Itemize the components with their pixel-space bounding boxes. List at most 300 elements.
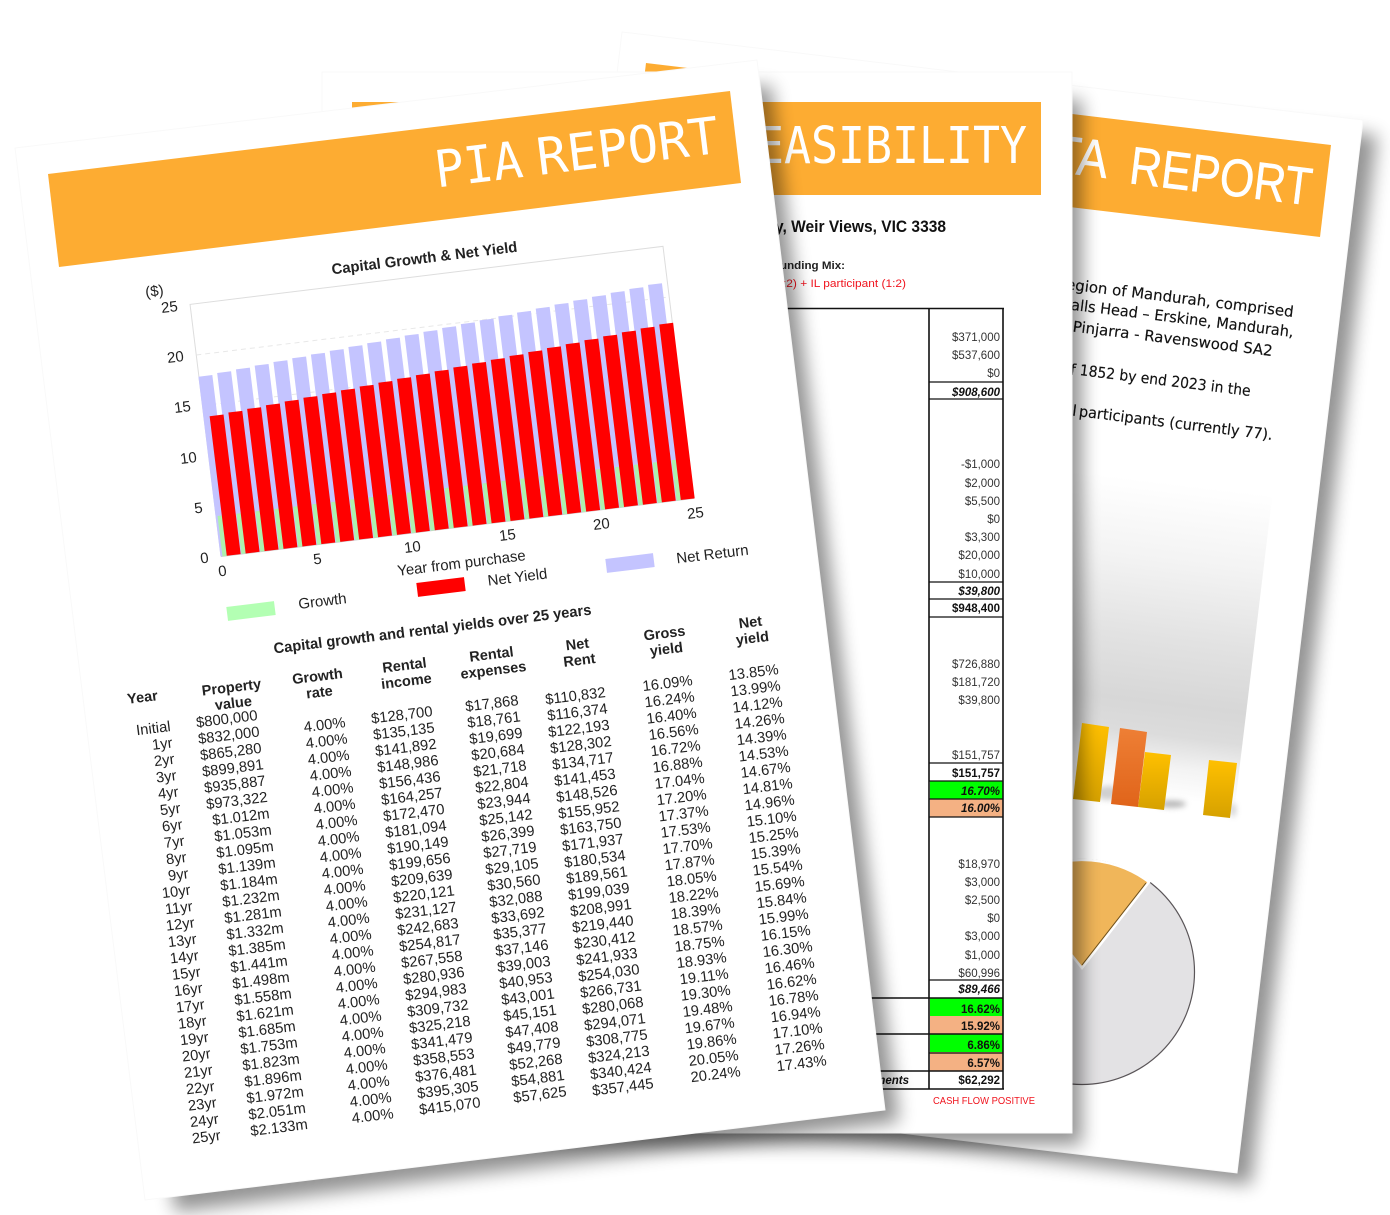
feasibility table: $371,000 — [952, 332, 1000, 344]
table column: net yield: 15.10% — [746, 809, 797, 831]
table column: property value: $1.896m — [244, 1068, 303, 1091]
table column: rental income: $280,936 — [402, 965, 466, 988]
table column: property value: $1.621m — [236, 1003, 295, 1025]
table column: net rent: $180,534 — [563, 848, 626, 871]
table headers: Gross — [643, 624, 686, 645]
table column: net yield: 17.26% — [774, 1037, 826, 1059]
table column: growth rate: 4.00% — [345, 1057, 389, 1078]
table column: net rent: $171,937 — [561, 832, 624, 855]
table column: net yield: 14.67% — [740, 760, 791, 782]
table column: growth rate: 4.00% — [305, 731, 348, 752]
table headers: Rental — [382, 655, 427, 677]
table column: gross yield: 18.22% — [668, 885, 720, 907]
back page paragraph text: Pinjarra - Ravenswood SA2 — [1072, 318, 1274, 360]
chart legend: Net Return — [675, 542, 749, 567]
feasibility table: 16.00% — [961, 803, 1000, 815]
front page banner: PIA — [431, 131, 526, 200]
table column: gross yield: 16.56% — [648, 722, 699, 744]
table column: property value: $1.053m — [213, 823, 273, 845]
table column: rental income: $267,558 — [400, 949, 464, 972]
x axis labels: 0 — [217, 563, 228, 580]
table column: growth rate: 4.00% — [329, 927, 373, 948]
table column: year: 3yr — [155, 768, 178, 787]
table column: growth rate: 4.00% — [321, 862, 364, 883]
x axis labels: Year from purchase — [396, 547, 527, 580]
table column: net rent: $155,952 — [557, 799, 620, 823]
table column: rental expenses: $26,399 — [480, 823, 535, 846]
feasibility table: $0 — [987, 913, 1000, 925]
table column: gross yield: 19.30% — [680, 983, 732, 1005]
table column: rental income: $395,305 — [416, 1079, 480, 1102]
feasibility table: $60,996 — [958, 968, 1000, 980]
feasibility table: 6.86% — [967, 1040, 1000, 1052]
table column: growth rate: 4.00% — [333, 960, 377, 981]
panel: middle page feasibility — [322, 72, 1082, 1145]
table column: gross yield: 18.39% — [670, 901, 722, 923]
table column: year: 1yr — [151, 735, 174, 754]
table column: gross yield: 18.05% — [666, 869, 718, 891]
table column: gross yield: 17.87% — [664, 852, 715, 874]
table column: rental expenses: $32,088 — [488, 889, 544, 911]
table column: net yield: 16.15% — [760, 923, 812, 945]
table column: property value: $1.281m — [223, 904, 283, 927]
table column: rental expenses: $43,001 — [500, 986, 556, 1009]
table headers: Rent — [562, 651, 597, 671]
table column: property value: $1.558m — [234, 986, 293, 1009]
table column: growth rate: 4.00% — [347, 1074, 391, 1095]
table column: rental expenses: $18,761 — [466, 709, 521, 732]
table column: property value: $1.972m — [246, 1084, 305, 1107]
table column: gross yield: 17.53% — [660, 820, 711, 842]
back page paragraph text: 1852 by end 2023 in the — [1079, 361, 1252, 400]
feasibility table: $39,800 — [958, 695, 1000, 707]
table headers: Rental — [469, 644, 514, 666]
table column: property value: $832,000 — [197, 724, 260, 748]
table column: net rent: $128,302 — [549, 734, 612, 757]
feasibility table: $62,292 — [958, 1075, 1000, 1087]
table column: year: 18yr — [177, 1014, 208, 1033]
table column: rental expenses: $45,151 — [502, 1003, 558, 1025]
table column: gross yield: 17.37% — [658, 803, 709, 825]
table column: net rent: $148,526 — [555, 783, 618, 806]
table column: rental expenses: $23,944 — [476, 791, 531, 813]
table column: net yield: 17.10% — [772, 1021, 824, 1043]
table column: net rent: $266,731 — [579, 978, 643, 1002]
table column: year: 16yr — [173, 981, 204, 1000]
y axis labels: 25 — [160, 298, 179, 317]
table column: gross yield: 18.57% — [672, 918, 724, 940]
table column: growth rate: 4.00% — [309, 764, 352, 785]
table column: net yield: 14.53% — [738, 744, 789, 766]
table column: net yield: 15.84% — [756, 890, 808, 912]
table headers: rate — [305, 683, 334, 702]
table column: year: 8yr — [165, 850, 188, 868]
table column: property value: $2.051m — [248, 1101, 307, 1124]
feasibility table: $2,000 — [965, 478, 1000, 490]
y axis labels: 0 — [199, 550, 210, 567]
middle page address heading: y, Weir Views, VIC 3338 — [775, 218, 946, 236]
table column: rental expenses: $39,003 — [496, 954, 552, 976]
table column: growth rate: 4.00% — [317, 829, 360, 850]
table headers: income — [380, 671, 433, 693]
table column: rental expenses: $35,377 — [492, 921, 548, 944]
table column: growth rate: 4.00% — [331, 943, 375, 964]
x axis labels: 25 — [686, 504, 705, 523]
panel: front page PIA report — [15, 60, 899, 1212]
table column: rental income: $156,436 — [378, 769, 441, 793]
table column: rental expenses: $52,268 — [508, 1052, 564, 1074]
feasibility table: ments — [875, 1075, 909, 1087]
table column: rental expenses: $29,105 — [484, 856, 539, 878]
x axis labels: 10 — [403, 538, 422, 557]
feasibility table: $151,757 — [952, 768, 1000, 780]
table headers: value — [214, 694, 253, 714]
table column: net yield: 14.81% — [742, 776, 793, 798]
table headers: yield — [735, 629, 770, 649]
table column: net rent: $294,071 — [583, 1011, 647, 1034]
table column: year: 12yr — [165, 915, 196, 935]
feasibility table: $3,000 — [965, 931, 1000, 943]
table column: growth rate: 4.00% — [313, 797, 356, 818]
table column: gross yield: 17.70% — [662, 836, 713, 858]
chart title: Capital Growth & Net Yield — [331, 239, 518, 278]
table column: net yield: 14.26% — [734, 711, 785, 733]
table column: gross yield: 16.72% — [650, 738, 701, 760]
table column: gross yield: 17.20% — [656, 787, 707, 809]
table column: net yield: 14.39% — [736, 727, 787, 749]
table column: net rent: $208,991 — [569, 897, 633, 920]
table headers — [126, 613, 770, 715]
table column: net yield: 16.78% — [768, 988, 820, 1010]
feasibility table: $151,757 — [952, 750, 1000, 762]
x axis labels: 20 — [592, 515, 611, 534]
table column: rental expenses: $47,408 — [504, 1019, 560, 1041]
table column: net rent: $280,068 — [581, 995, 645, 1018]
table column: net rent: $163,750 — [559, 815, 622, 839]
table column: rental income: $164,257 — [380, 786, 443, 809]
table column: net rent: $110,832 — [544, 685, 606, 708]
table column: rental income: $242,683 — [396, 916, 460, 939]
table column: rental expenses: $19,699 — [468, 726, 523, 748]
table column: net yield: 16.62% — [766, 972, 818, 994]
table column: rental expenses: $27,719 — [482, 840, 537, 862]
table column: growth rate: 4.00% — [323, 878, 366, 899]
table column: growth rate: 4.00% — [307, 748, 350, 769]
table column: growth rate: 4.00% — [343, 1041, 387, 1062]
x axis labels: 5 — [312, 551, 323, 568]
funding mix value: :2) + IL participant (1:2) — [783, 278, 906, 290]
table column: net yield: 15.39% — [750, 841, 801, 863]
table column: net rent: $189,561 — [565, 864, 628, 888]
feasibility table: $726,880 — [952, 659, 1000, 671]
chart legend: Net Yield — [487, 565, 548, 590]
table column: gross yield: 16.40% — [646, 706, 697, 728]
table column: property value: $800,000 — [195, 708, 258, 731]
chart legend: Growth — [297, 590, 347, 613]
table column: rental income: $358,553 — [412, 1046, 476, 1070]
table column: net rent: $254,030 — [577, 962, 641, 986]
table column: property value: $1.095m — [215, 839, 275, 862]
feasibility table: $18,970 — [958, 859, 1000, 871]
table column: net yield: 15.25% — [748, 825, 799, 847]
table column: growth rate: 4.00% — [319, 845, 362, 866]
y axis labels: 20 — [166, 348, 185, 367]
table column: gross yield: 16.09% — [642, 673, 693, 695]
feasibility table: $537,600 — [952, 350, 1000, 362]
table column: net rent: $357,445 — [591, 1076, 655, 1100]
table column: rental expenses: $54,881 — [510, 1068, 566, 1090]
feasibility table: $1,000 — [965, 950, 1000, 962]
table column: net yield: 16.46% — [764, 955, 816, 977]
table column: property value: $1.139m — [217, 855, 277, 878]
table column: rental income: $190,149 — [386, 834, 449, 858]
table column: net yield: 14.96% — [744, 792, 795, 814]
table headers: Growth — [291, 666, 344, 688]
table column: year: 14yr — [169, 948, 200, 967]
table column: gross yield: 19.67% — [684, 1015, 736, 1037]
table column: net rent: $340,424 — [589, 1060, 653, 1083]
panel: back page data report — [496, 32, 1377, 1185]
front page banner: REPORT — [533, 107, 722, 188]
table column: rental expenses: $57,625 — [512, 1084, 568, 1107]
y axis labels: 10 — [179, 449, 198, 468]
table column: rental income: $128,700 — [370, 704, 433, 727]
table column: rental income: $172,470 — [382, 802, 445, 825]
back page bar chart image — [960, 456, 1273, 822]
table column: rental expenses: $22,804 — [474, 775, 529, 797]
table column: year: 2yr — [153, 752, 176, 770]
table headers: yield — [649, 640, 684, 660]
table column: year: 24yr — [189, 1112, 220, 1131]
back page paragraph text — [1055, 274, 1295, 444]
table column: rental expenses: $25,142 — [478, 807, 533, 830]
back page paragraph text: alls Head – Erskine, Mandurah, — [1070, 296, 1295, 341]
x axis labels: 15 — [498, 526, 517, 545]
table column: year: 9yr — [167, 866, 190, 885]
table column: net yield: 15.99% — [758, 907, 810, 929]
table column: growth rate: 4.00% — [335, 976, 379, 997]
table column: year: 10yr — [161, 883, 192, 902]
table column: growth rate: 4.00% — [349, 1090, 393, 1111]
feasibility table: $0 — [987, 368, 1000, 380]
table column: rental expenses: $20,684 — [470, 742, 525, 764]
table column: net rent: $241,933 — [575, 946, 639, 969]
table column: rental expenses: $30,560 — [486, 872, 541, 895]
table column: gross yield: 19.86% — [686, 1032, 738, 1054]
feasibility table: 6.57% — [967, 1058, 1000, 1070]
chart legend — [226, 542, 749, 621]
back page banner: REPORT — [1127, 136, 1315, 217]
table column: year: 7yr — [163, 834, 186, 852]
feasibility table: $0 — [987, 514, 1000, 526]
table column: growth rate: 4.00% — [311, 780, 354, 801]
table column: rental expenses: $17,868 — [464, 693, 519, 715]
table column: net rent: $324,213 — [587, 1044, 651, 1067]
table column: growth rate: 4.00% — [303, 715, 346, 736]
table column: property value: $1.385m — [227, 937, 287, 960]
feasibility table: $3,000 — [965, 877, 1000, 889]
table column: year: 19yr — [179, 1030, 210, 1049]
feasibility table: $908,600 — [951, 387, 1001, 399]
table column: rental expenses: $33,692 — [490, 905, 546, 927]
table column: net yield: 13.85% — [728, 662, 779, 684]
table column: property value: $865,280 — [199, 741, 263, 764]
table headers: Net — [738, 614, 763, 632]
table column: rental income: $181,094 — [384, 818, 447, 842]
table column: net rent: $230,412 — [573, 930, 637, 953]
table column: year: 15yr — [171, 964, 202, 984]
table column: net yield: 15.69% — [754, 874, 806, 896]
table column: rental income: $199,656 — [388, 851, 451, 874]
table column: net yield: 17.43% — [776, 1053, 828, 1075]
table headers: Year — [126, 688, 159, 708]
table column: net rent: $122,193 — [547, 718, 610, 741]
back page pie chart — [970, 860, 1194, 1084]
feasibility table: $181,720 — [952, 677, 1000, 689]
feasibility table: $39,800 — [957, 586, 1001, 598]
feasibility table: $10,000 — [958, 569, 1000, 581]
table column: rental income: $148,986 — [376, 753, 439, 776]
table column: rental income: $325,218 — [408, 1014, 472, 1037]
x axis labels — [217, 504, 705, 580]
table column: rental income: $231,127 — [394, 900, 458, 923]
table column: property value: $1.823m — [242, 1052, 301, 1074]
table column: net yield: 15.54% — [752, 858, 804, 880]
table column: year: 5yr — [159, 801, 182, 819]
table column: year: Initial — [135, 719, 171, 739]
feasibility table: $948,400 — [952, 603, 1000, 615]
table column: gross yield: 20.05% — [688, 1048, 740, 1070]
y axis labels: 15 — [173, 398, 192, 417]
table column: property value: $1.332m — [225, 921, 285, 944]
table column: rental income: $141,892 — [374, 737, 437, 760]
middle page banner — [352, 102, 1041, 195]
table column: rental expenses: $49,779 — [506, 1035, 562, 1058]
table column: gross yield: 19.48% — [682, 999, 734, 1021]
table column: rental expenses: $21,718 — [472, 758, 527, 781]
table column: gross yield: 18.93% — [676, 950, 728, 972]
table column: net rent: $308,775 — [585, 1027, 649, 1051]
y axis labels — [144, 282, 210, 567]
feasibility table: 16.62% — [961, 1004, 1000, 1016]
series: net return — [194, 283, 688, 557]
table title: Capital growth and rental yields over 25 years — [273, 602, 592, 657]
table column: property value: $1.441m — [229, 953, 289, 976]
feasibility table — [700, 308, 1004, 1089]
table column: rental income: $415,070 — [418, 1095, 482, 1119]
feasibility table: $2,500 — [965, 895, 1000, 907]
table column: net yield: 13.99% — [730, 678, 781, 700]
table column: property value: $1.232m — [221, 888, 281, 911]
feasibility table: $20,000 — [958, 550, 1000, 562]
table column: gross yield: 16.88% — [652, 755, 703, 777]
table column: property value: $935,887 — [203, 774, 267, 797]
back page paragraph text: of — [1060, 359, 1077, 379]
feasibility table: $89,466 — [957, 984, 1001, 996]
table column: property value: $1.753m — [240, 1035, 299, 1058]
table column: year: 21yr — [183, 1063, 214, 1082]
table column: growth rate: 4.00% — [339, 1008, 383, 1029]
table column: year: 20yr — [181, 1046, 212, 1066]
feasibility table: $5,500 — [965, 496, 1000, 508]
table column: year: 22yr — [185, 1079, 216, 1098]
series: net yield — [205, 323, 695, 556]
table headers: Net — [565, 636, 590, 654]
back page paragraph text: l — [1071, 402, 1078, 420]
table column: year: 11yr — [164, 899, 194, 918]
table column: property value: $1.012m — [211, 806, 271, 829]
table column: net rent: $116,374 — [546, 701, 608, 725]
table column: rental expenses: $40,953 — [498, 970, 554, 993]
table headers: Property — [201, 676, 262, 700]
table column: property value: $1.184m — [219, 872, 279, 895]
y axis labels: ($) — [144, 282, 165, 301]
series: growth — [218, 460, 682, 556]
table column: property value: $899,891 — [201, 757, 265, 781]
table column: rental income: $294,983 — [404, 981, 468, 1005]
table column: rental income: $209,639 — [390, 867, 453, 890]
table column: net rent: $134,717 — [551, 750, 614, 774]
table column: net yield: 16.94% — [770, 1004, 822, 1026]
table column: gross yield: 17.04% — [654, 771, 705, 793]
feasibility table: 16.70% — [961, 786, 1000, 798]
table column: gross yield: 18.75% — [674, 934, 726, 956]
table column: rental expenses: $37,146 — [494, 938, 550, 960]
cash flow note: CASH FLOW POSITIVE — [933, 1095, 1035, 1107]
table column: gross yield: 20.24% — [690, 1064, 742, 1086]
table column: year: 25yr — [191, 1128, 222, 1147]
front page banner — [48, 91, 741, 267]
table column: property value: $973,322 — [205, 790, 269, 813]
table column: year: 4yr — [157, 785, 180, 803]
table column: growth rate: 4.00% — [351, 1106, 395, 1127]
table column: rental income: $254,817 — [398, 932, 462, 956]
table column: property value: $1.498m — [232, 970, 291, 993]
table column: year: 23yr — [187, 1095, 218, 1115]
back page banner: DATA — [988, 117, 1112, 190]
table column: rental income: $341,479 — [410, 1030, 474, 1053]
table column: rental income: $376,481 — [414, 1063, 478, 1086]
back page paragraph text: participants (currently 77). — [1078, 402, 1274, 444]
table column: net rent: $219,440 — [571, 913, 635, 937]
table column: growth rate: 4.00% — [325, 894, 368, 915]
table column: gross yield: 19.11% — [679, 966, 730, 988]
table column: growth rate: 4.00% — [327, 911, 371, 932]
feasibility table: $3,300 — [965, 532, 1000, 544]
table column: year: 13yr — [167, 932, 198, 951]
back page paragraph text: Region of Mandurah, comprised — [1055, 274, 1295, 321]
table column: rental income: $135,135 — [372, 720, 435, 744]
table column: net rent: $199,039 — [567, 881, 631, 904]
table column: gross yield: 16.24% — [644, 689, 695, 711]
table column: net yield: 16.30% — [762, 939, 814, 961]
table column: growth rate: 4.00% — [341, 1025, 385, 1046]
table column: property value: $1.685m — [238, 1019, 297, 1042]
table column: year: 17yr — [175, 997, 206, 1017]
back page banner — [635, 63, 1331, 237]
funding mix label: unding Mix: — [780, 260, 845, 272]
y axis labels: 5 — [193, 500, 204, 517]
feasibility table: 15.92% — [961, 1021, 1000, 1033]
table column: year: 6yr — [161, 817, 184, 836]
table column: growth rate: 4.00% — [337, 992, 381, 1013]
table column: net yield: 14.12% — [732, 695, 783, 717]
bar chart: capital growth and net yield — [144, 246, 749, 621]
table column: net rent: $141,453 — [553, 767, 616, 790]
table column: rental income: $220,121 — [392, 883, 455, 907]
middle page banner: FEASIBILITY — [730, 117, 1027, 176]
table headers: expenses — [460, 659, 527, 683]
